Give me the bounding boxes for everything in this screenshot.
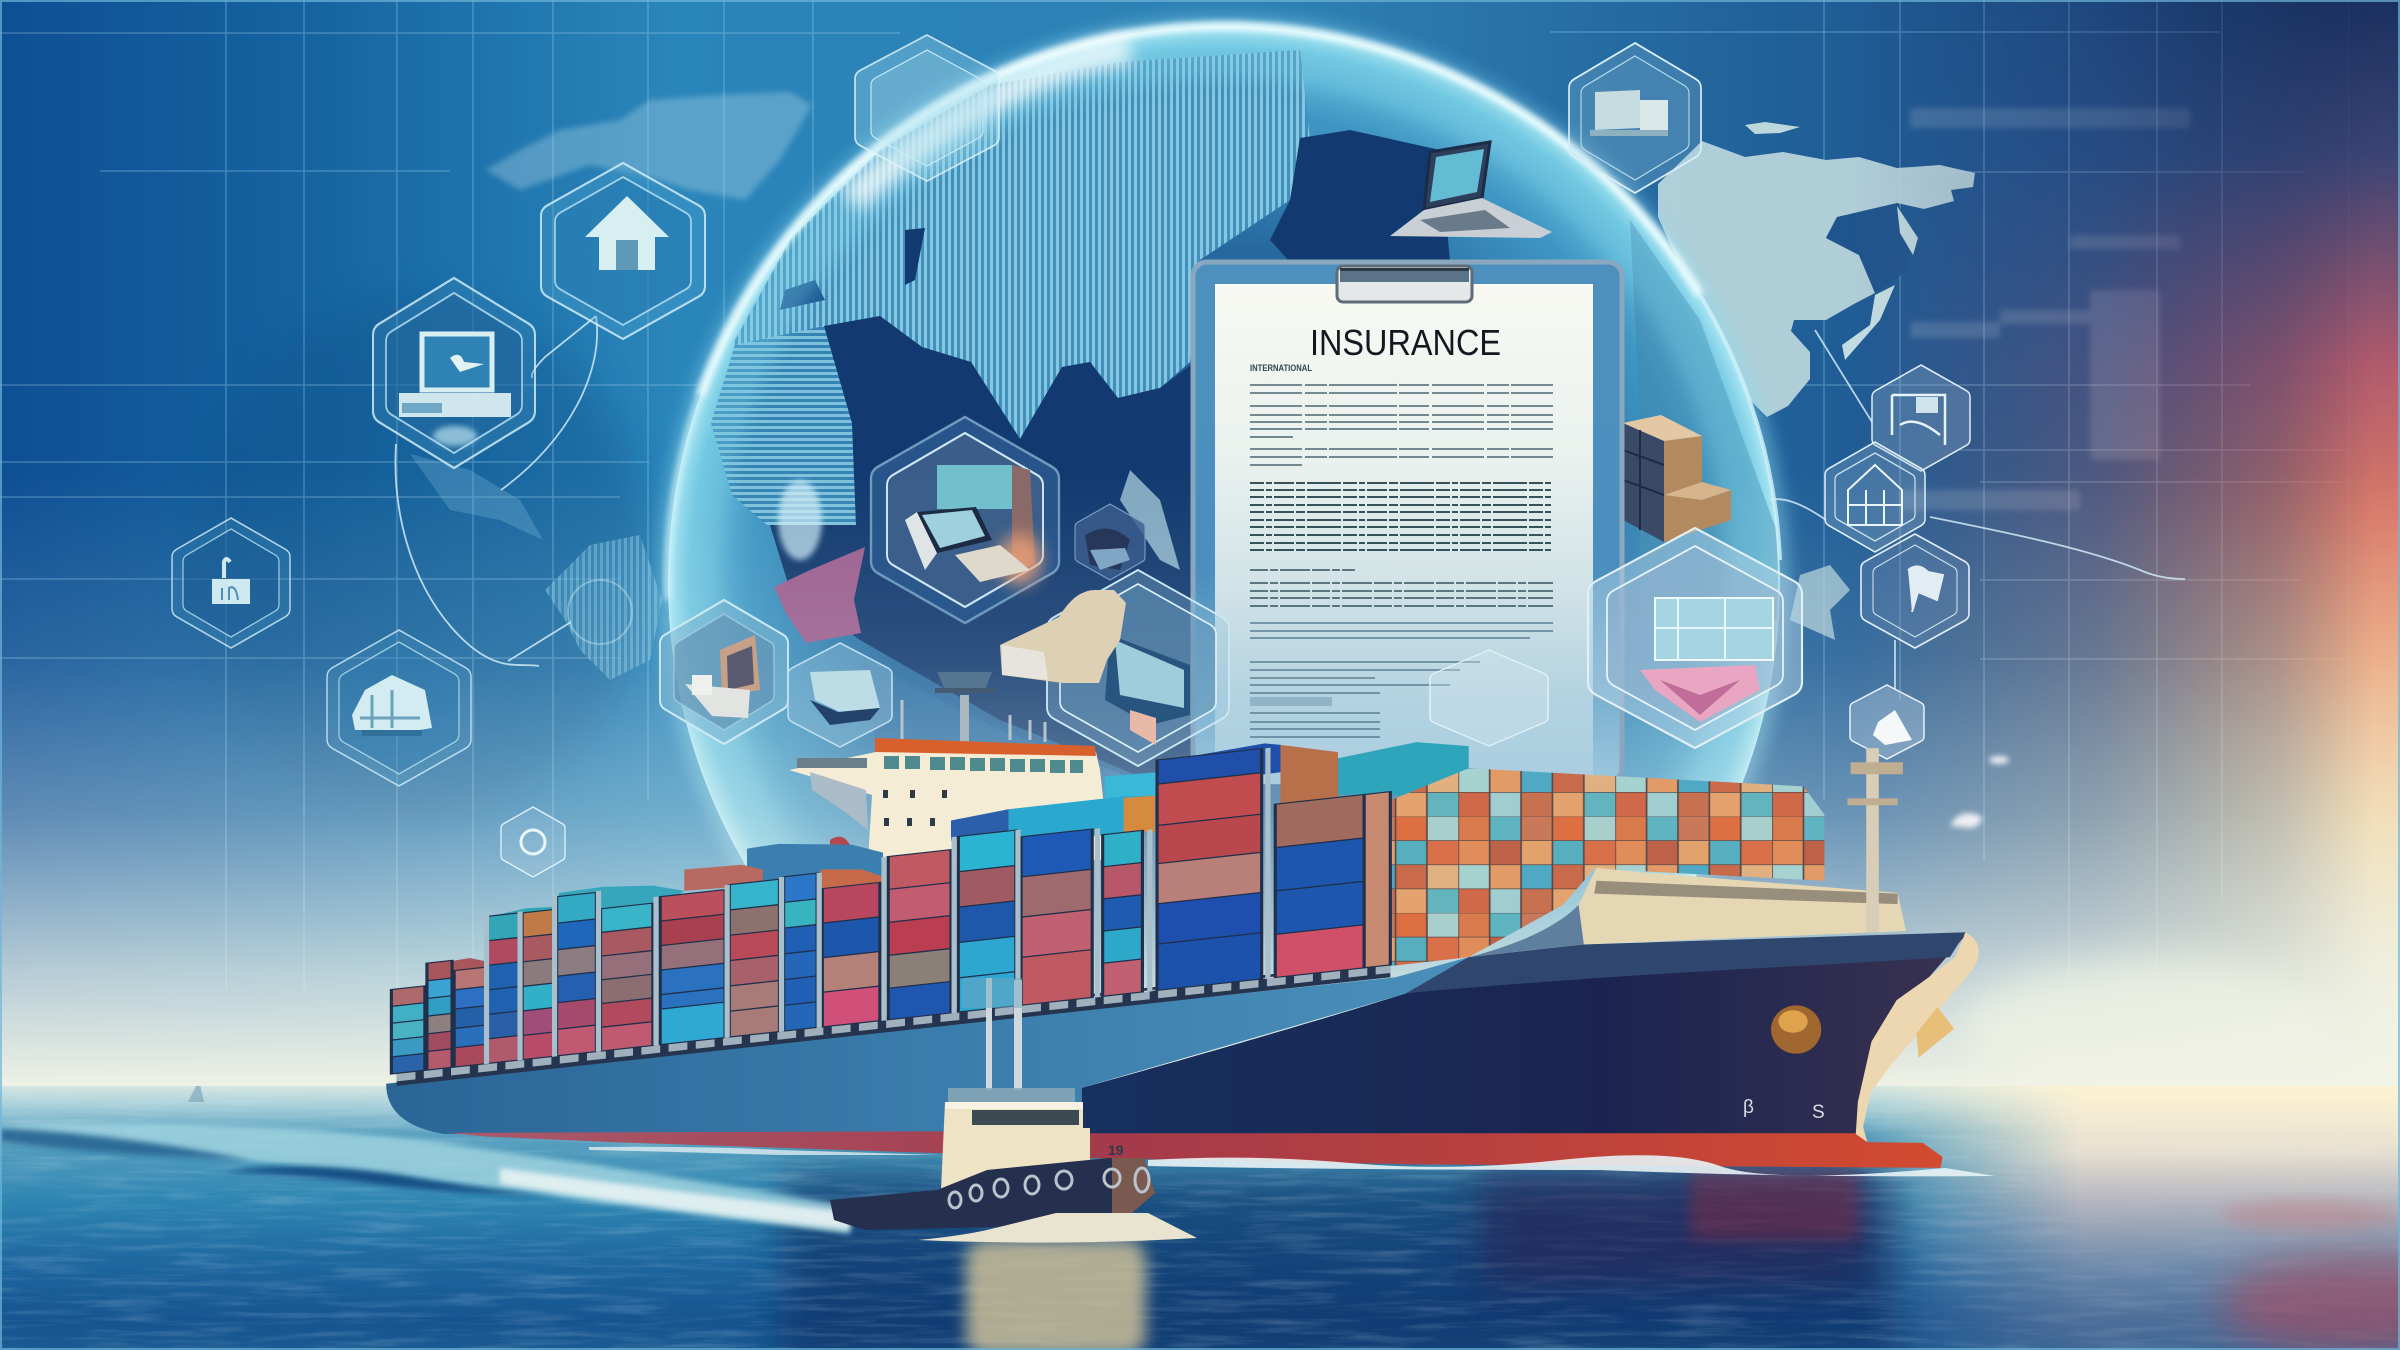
tug tyres <box>949 1168 1149 1208</box>
world map: north america <box>486 92 812 200</box>
tug mast <box>948 978 1075 1102</box>
container facade at the forward stack <box>1390 768 1824 966</box>
hull: navy bow <box>1082 935 1966 1133</box>
document heading: INTERNATIONAL <box>1250 363 1312 373</box>
hull markings: S <box>1812 1102 1825 1123</box>
upper deck containers <box>427 742 1469 993</box>
hull: red boot-top <box>449 1131 1943 1168</box>
hexagon icon: shelter <box>1872 365 1970 471</box>
metal clip <box>1337 266 1472 302</box>
hexagon icon: tool <box>1861 534 1969 648</box>
hexagon icon: warehouse frame <box>1825 442 1925 552</box>
hexagon icon: top of globe <box>855 35 999 181</box>
tug number: 19 <box>1108 1142 1124 1158</box>
hexagon icon: house <box>541 163 705 339</box>
hexagon icon: small gauge <box>501 807 565 877</box>
stacked cargo boxes <box>1623 415 1731 542</box>
anchor <box>1771 1005 1821 1054</box>
distant vessel <box>188 1086 204 1102</box>
forward cream superstructure <box>1469 868 1906 957</box>
forward mast <box>1866 748 1879 932</box>
clipboard with insurance document <box>1193 262 1622 784</box>
tugboat <box>830 978 1197 1243</box>
world map: south america <box>545 535 662 680</box>
hexagon icon: delivery truck <box>1569 43 1701 193</box>
world map: east asia <box>1658 122 1975 640</box>
sky warm glow at right edge <box>1850 0 2400 1100</box>
tug hull <box>830 1158 1155 1230</box>
golden tug reflection <box>966 1240 1146 1350</box>
hexagon icon: warehouse <box>327 630 471 786</box>
document title: INSURANCE <box>1310 322 1501 363</box>
deck railing band <box>397 961 1390 1086</box>
connector lines <box>395 316 2185 690</box>
hexagon icon: padlock <box>172 518 290 648</box>
sea <box>0 1080 2400 1350</box>
bridge superstructure <box>789 672 1110 860</box>
clipboard board <box>1193 262 1622 782</box>
world map: central america <box>410 454 543 540</box>
bow cream edge <box>1856 932 1979 1142</box>
hexagon icon: desktop computer <box>660 600 788 744</box>
navy and red hull reflection <box>1480 1170 1870 1290</box>
faint shield watermark <box>1430 650 1548 746</box>
containers: sheared stacks <box>391 735 1390 1074</box>
mast with antennas <box>902 672 1045 745</box>
sky fade toward horizon <box>0 470 2400 1095</box>
background grid lines <box>0 0 2360 1000</box>
tug bow spray <box>918 1213 1197 1243</box>
globe landmasses and sea <box>696 50 1780 1110</box>
document body lines <box>1250 385 1553 737</box>
armchair <box>1000 590 1126 683</box>
clouds <box>1950 756 2009 828</box>
hexagon icon: small dark device <box>1075 504 1145 580</box>
laptop on the top of the clipboard <box>1390 142 1552 238</box>
container ship <box>386 735 1979 1168</box>
hexagon icon: armchair and screen <box>1000 570 1229 766</box>
hull markings <box>1743 1097 1825 1123</box>
bow wave foam <box>589 1147 1995 1176</box>
pink sea tint <box>2220 1255 2400 1350</box>
bulbous fin <box>1916 1007 1954 1058</box>
hexagon icon: scanner <box>788 643 892 747</box>
pale sea at right <box>1860 1080 2400 1350</box>
hexagon icon: monitor <box>373 278 535 468</box>
paper sheet <box>1215 284 1593 784</box>
hull markings: β <box>1743 1097 1754 1118</box>
right hazy data panels <box>1900 108 2190 510</box>
tug cabin <box>941 1102 1090 1190</box>
hexagon icon: small house <box>1850 685 1924 759</box>
wake from the tug <box>0 1123 850 1234</box>
hexagon icon: large pink book <box>1588 528 1802 748</box>
deep water near the ship <box>780 1170 1900 1350</box>
sun glow at the horizon <box>1960 960 2340 1100</box>
hexagon icon: laptop on desk <box>871 417 1059 623</box>
lashing posts <box>487 748 1268 1064</box>
hull: light blue midsection <box>386 957 1469 1138</box>
globe <box>651 10 1798 952</box>
